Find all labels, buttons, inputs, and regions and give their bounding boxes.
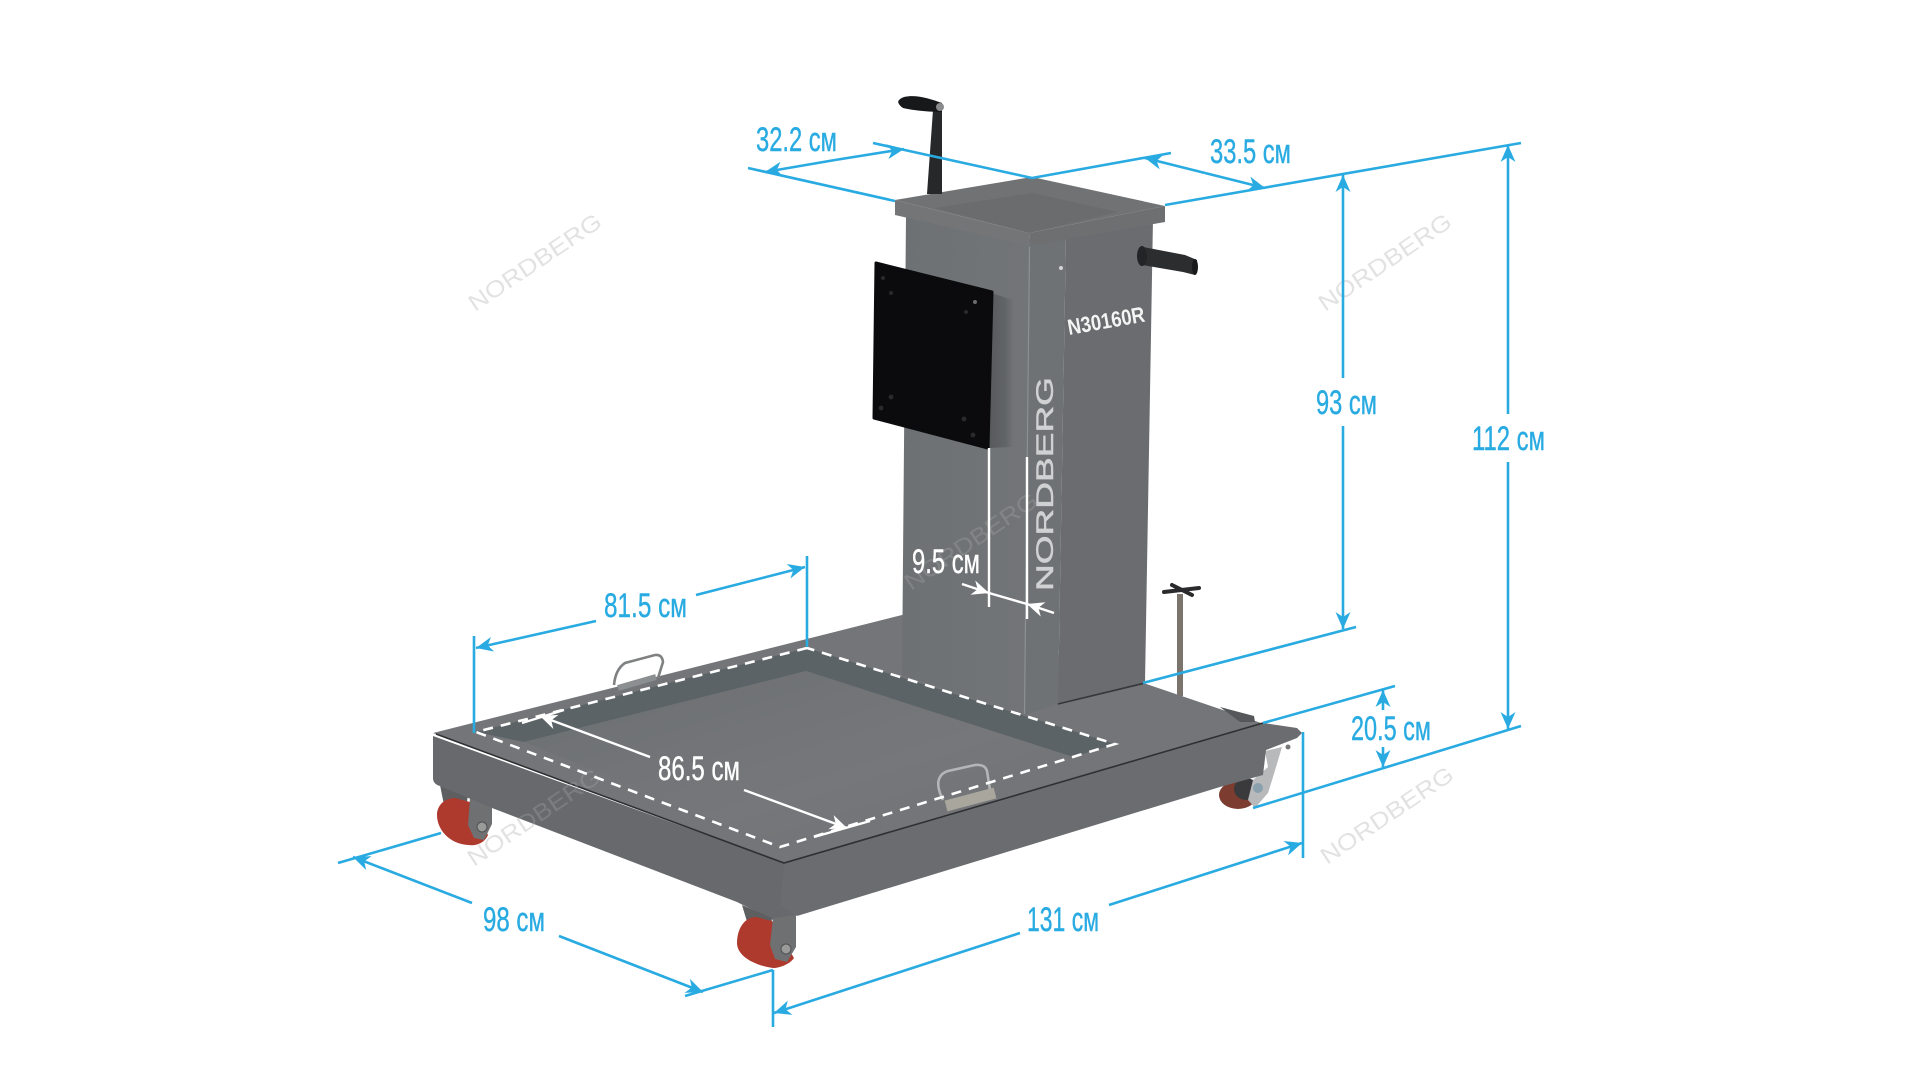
dimension: 33.5 cm: 33.5 см <box>1210 133 1291 171</box>
left apron <box>433 736 797 920</box>
watermark: NORDBERG top right: NORDBERG <box>1313 208 1456 316</box>
left tray handle <box>614 655 663 688</box>
dimension: 9.5 cm <box>912 448 1054 619</box>
dimension: 131 cm <box>773 732 1303 1027</box>
tray floor <box>524 671 1073 847</box>
watermark: NORDBERG on base: NORDBERG <box>462 763 605 871</box>
black mounting plate <box>874 263 992 448</box>
rear left wheel <box>437 785 492 845</box>
platform top surface <box>433 609 1264 863</box>
dimension: 9.5 cm: 9.5 см <box>912 543 980 581</box>
crank handle <box>898 96 944 194</box>
dimension: 98 cm: 98 см <box>483 901 545 939</box>
dimension: 33.5 cm <box>1032 133 1521 205</box>
tray wall left <box>476 648 807 742</box>
plate bolts <box>879 276 977 437</box>
dashed tray outline <box>476 648 1115 847</box>
dimension: 20.5 cm <box>1263 686 1431 767</box>
dimension: 86.5 cm <box>522 710 870 837</box>
right apron <box>780 723 1302 916</box>
watermark: NORDBERG top left: NORDBERG <box>463 208 606 316</box>
dimension: 86.5 cm: 86.5 см <box>658 750 740 788</box>
watermark: NORDBERG bottom right: NORDBERG <box>1315 761 1458 869</box>
T-handle rod <box>1164 585 1199 696</box>
column cap <box>895 177 1165 246</box>
rear right caster <box>1219 744 1290 809</box>
column <box>874 96 1198 715</box>
dimension: 98 cm <box>338 833 773 996</box>
model number label: N30160R <box>1066 302 1147 340</box>
dimension: 112 cm: 112 см <box>1472 420 1545 458</box>
tray wall right <box>806 648 1115 757</box>
dimension: 32.2 cm: 32.2 см <box>756 121 837 159</box>
dimension: 32.2 cm <box>748 121 1032 201</box>
plate shadow <box>988 293 1013 448</box>
rim shadow line <box>436 723 1263 863</box>
watermark: NORDBERG on column: NORDBERG <box>899 487 1042 595</box>
dimension: 112 cm <box>1253 145 1545 808</box>
dimension: 93 cm <box>1143 175 1377 683</box>
dimension: 81.5 cm: 81.5 см <box>604 587 687 625</box>
dimension: 131 cm: 131 см <box>1027 901 1099 939</box>
dimension: 93 cm: 93 см <box>1316 384 1377 422</box>
vertical brand label: NORDBERG <box>1032 377 1059 591</box>
machine stand illustration <box>433 96 1302 968</box>
rivet <box>1059 266 1063 270</box>
dimension: 81.5 cm <box>474 556 807 733</box>
front wheel <box>737 905 796 968</box>
side pin handle <box>1137 246 1198 275</box>
right tray handle <box>938 765 995 806</box>
dimension: 20.5 cm: 20.5 см <box>1351 710 1431 748</box>
rear bracket <box>1220 707 1255 722</box>
